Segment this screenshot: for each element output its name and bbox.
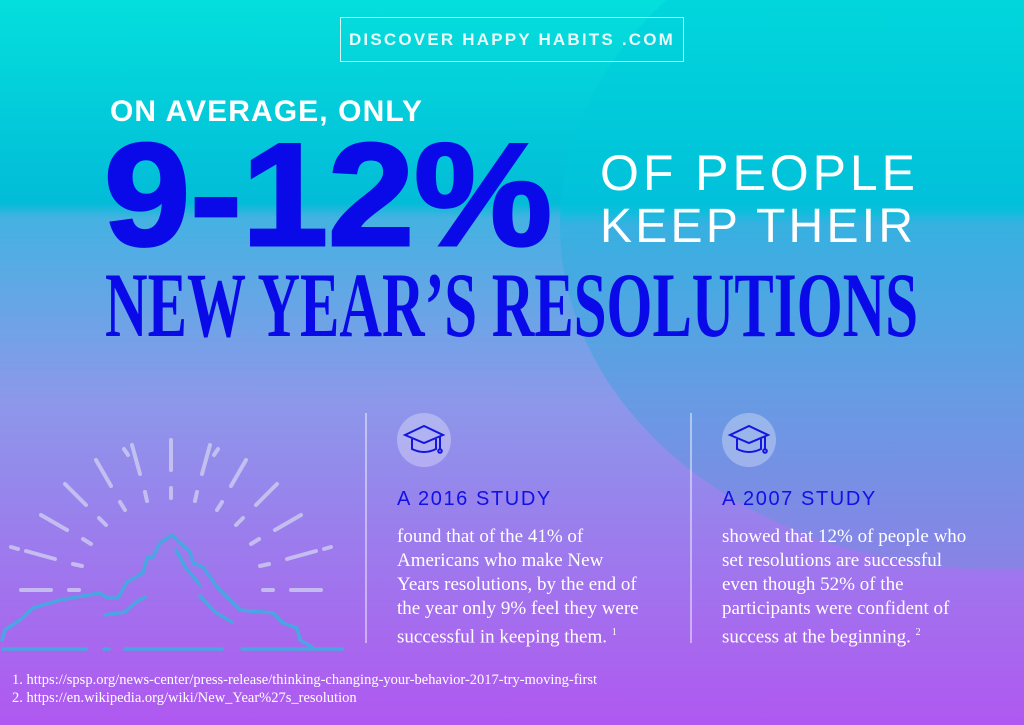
big number: 9-12% xyxy=(104,113,552,276)
text: the year only 9% feel they were xyxy=(397,598,639,619)
text: success at the beginning. 2 xyxy=(722,626,921,647)
divider 1 xyxy=(365,413,366,643)
of people: OF PEOPLE xyxy=(600,145,915,201)
divider 2 xyxy=(690,413,692,643)
footnotes: 2. https://en.wikipedia.org/wiki/New_Year%27s_resolution xyxy=(12,690,357,706)
brand box: DISCOVER HAPPY HABITS .COM xyxy=(349,30,675,49)
footnotes: 1. https://spsp.org/news-center/press-release/thinking-changing-your-behavior-2017-try-moving-first xyxy=(12,672,597,688)
panel: 2016 study xyxy=(397,413,639,647)
heading: A 2007 STUDY xyxy=(722,488,877,510)
text: Americans who make New xyxy=(397,550,603,571)
keep their: KEEP THEIR xyxy=(600,200,913,253)
text: participants were confident of xyxy=(722,598,949,619)
panel: 2007 study xyxy=(722,413,966,647)
heading: A 2016 STUDY xyxy=(397,488,552,510)
text: successful in keeping them. 1 xyxy=(397,626,617,647)
text: even though 52% of the xyxy=(722,574,904,595)
text xyxy=(722,526,966,647)
text: showed that 12% of people who xyxy=(722,526,966,547)
kicker: ON AVERAGE, ONLY xyxy=(110,95,422,128)
text xyxy=(397,526,639,647)
icon: graduation cap xyxy=(722,413,776,467)
text: Years resolutions, by the end of xyxy=(397,574,637,595)
footnotes xyxy=(12,672,597,706)
illustration: mountain sunburst xyxy=(0,438,344,651)
icon: graduation cap xyxy=(397,413,451,467)
text: set resolutions are successful xyxy=(722,550,942,571)
headline xyxy=(104,95,918,350)
brand box xyxy=(340,17,684,62)
text: found that of the 41% of xyxy=(397,526,583,547)
